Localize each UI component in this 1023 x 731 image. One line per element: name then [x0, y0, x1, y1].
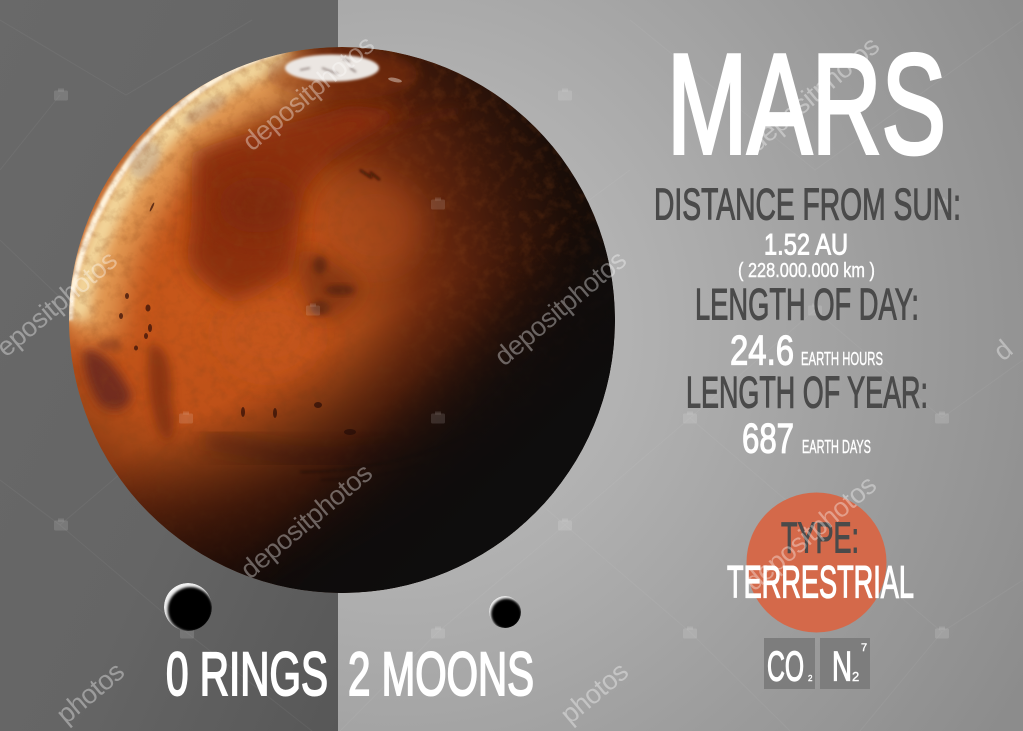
panel: dark left background [0, 0, 338, 731]
fact: length of day: EARTH HOURS [801, 349, 883, 369]
moon: left [164, 583, 213, 632]
fact: distance from sun: 1.52 AU [764, 228, 848, 262]
moon: right [489, 596, 522, 630]
planet: pale limb [70, 50, 310, 340]
tile: carbon dioxide [764, 638, 815, 690]
watermarks: d [988, 334, 1018, 367]
fact: length of day [695, 280, 919, 374]
label: 2 moons: 2 MOONS [348, 640, 534, 708]
fact: distance from sun [654, 180, 961, 282]
badge: planet type: TYPE: [781, 514, 859, 562]
fact: distance from sun: ( 228.000.000 km ) [738, 260, 875, 282]
fact: length of day: 24.6 [730, 326, 794, 374]
watermarks: depositphotos [739, 470, 882, 597]
planet: Mars [69, 47, 615, 593]
tile: nitrogen [820, 638, 870, 690]
tile: nitrogen: N [832, 642, 852, 690]
planet: southern dark terrain [78, 336, 342, 474]
panel: light right background [338, 0, 1023, 731]
fact: length of year: 687 [742, 414, 794, 462]
tile: carbon dioxide: CO [767, 642, 804, 690]
planet: surface texture [69, 47, 597, 424]
planet: craters [119, 202, 356, 435]
tile: nitrogen: 2 [852, 669, 859, 684]
fact: length of year: EARTH DAYS [802, 437, 871, 457]
fact: length of year [686, 368, 928, 462]
watermarks: depositphotos [235, 458, 378, 585]
watermarks: depositphotos [489, 245, 632, 372]
watermarks: depositphotos [237, 30, 380, 157]
watermarks: photos [51, 656, 130, 730]
tile: nitrogen: 7 [861, 642, 867, 654]
planet: north polar cap [267, 48, 417, 100]
watermarks: photos [555, 656, 634, 730]
planet: dark mare region [177, 100, 432, 327]
planet: terminator shadow [116, 214, 615, 593]
watermarks: depositphotos [742, 31, 885, 158]
badge: planet type [727, 492, 914, 632]
tile: carbon dioxide: 2 [808, 674, 813, 683]
label: 0 rings: 0 RINGS [166, 640, 328, 708]
watermark camera icons [54, 88, 949, 638]
